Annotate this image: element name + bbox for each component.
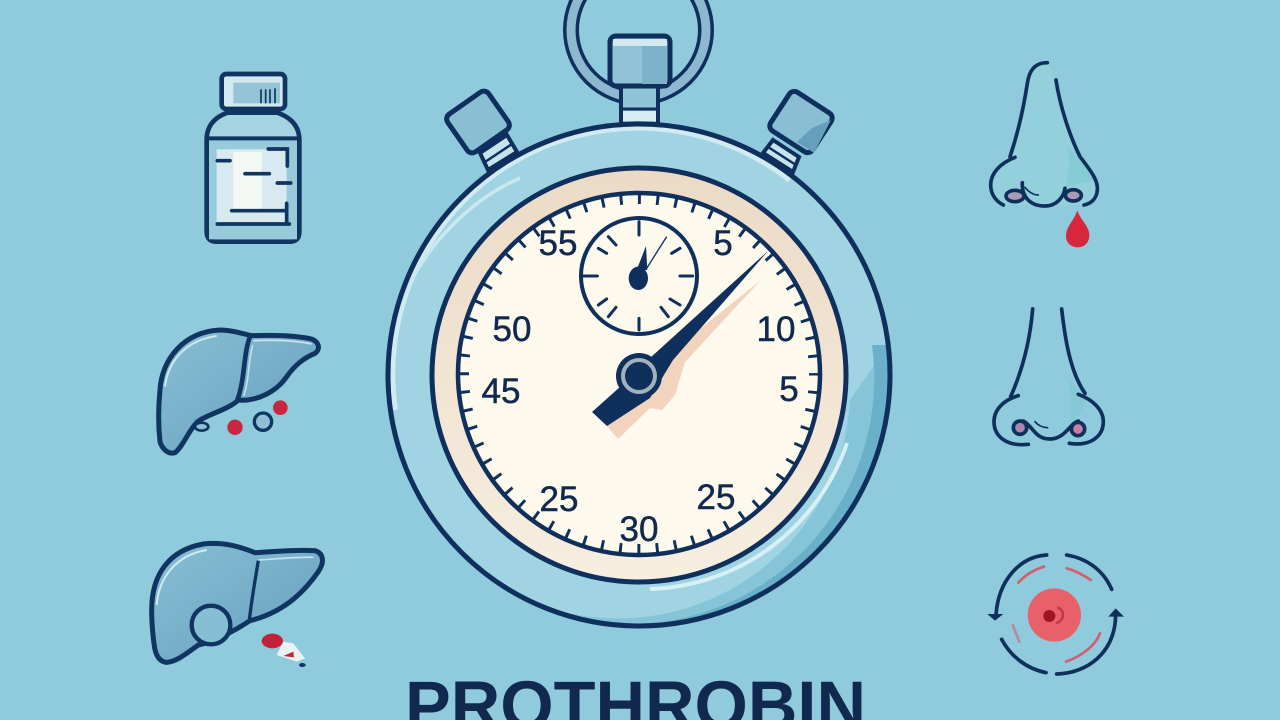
crown button — [610, 36, 670, 126]
case — [388, 124, 890, 626]
blood spot — [1028, 588, 1081, 642]
dial numbers: 30 — [620, 510, 658, 549]
main hand — [592, 251, 768, 426]
icon: nose — [994, 309, 1103, 445]
dial — [432, 168, 846, 582]
icon: medicine bottle — [207, 74, 299, 242]
left pusher — [444, 89, 517, 170]
dial numbers — [482, 224, 799, 549]
platelet ring — [254, 413, 272, 430]
icon: circular clotting cycle — [987, 555, 1124, 674]
dial numbers: 10 — [757, 310, 795, 349]
dial numbers: 5 — [779, 370, 799, 409]
right pusher — [763, 89, 834, 172]
dial numbers: 25 — [697, 478, 735, 517]
icon: nose with blood drop — [991, 63, 1097, 247]
sub-dial — [581, 218, 697, 334]
dial numbers: 25 — [540, 480, 578, 519]
stopwatch — [388, 0, 890, 626]
crown ring — [571, 0, 706, 98]
dial numbers: 50 — [493, 310, 531, 349]
dial numbers: 45 — [482, 372, 520, 411]
hub — [616, 353, 662, 399]
red blood cell — [227, 420, 243, 435]
hand shadow — [607, 281, 760, 439]
dial numbers: 55 — [539, 224, 577, 263]
dial numbers: 5 — [713, 224, 733, 263]
blood drop — [1066, 211, 1089, 247]
icon: liver with cyst — [152, 543, 322, 667]
clot fragments — [262, 634, 306, 667]
red blood cell — [273, 400, 288, 415]
icon: liver with blood cells — [159, 330, 318, 453]
